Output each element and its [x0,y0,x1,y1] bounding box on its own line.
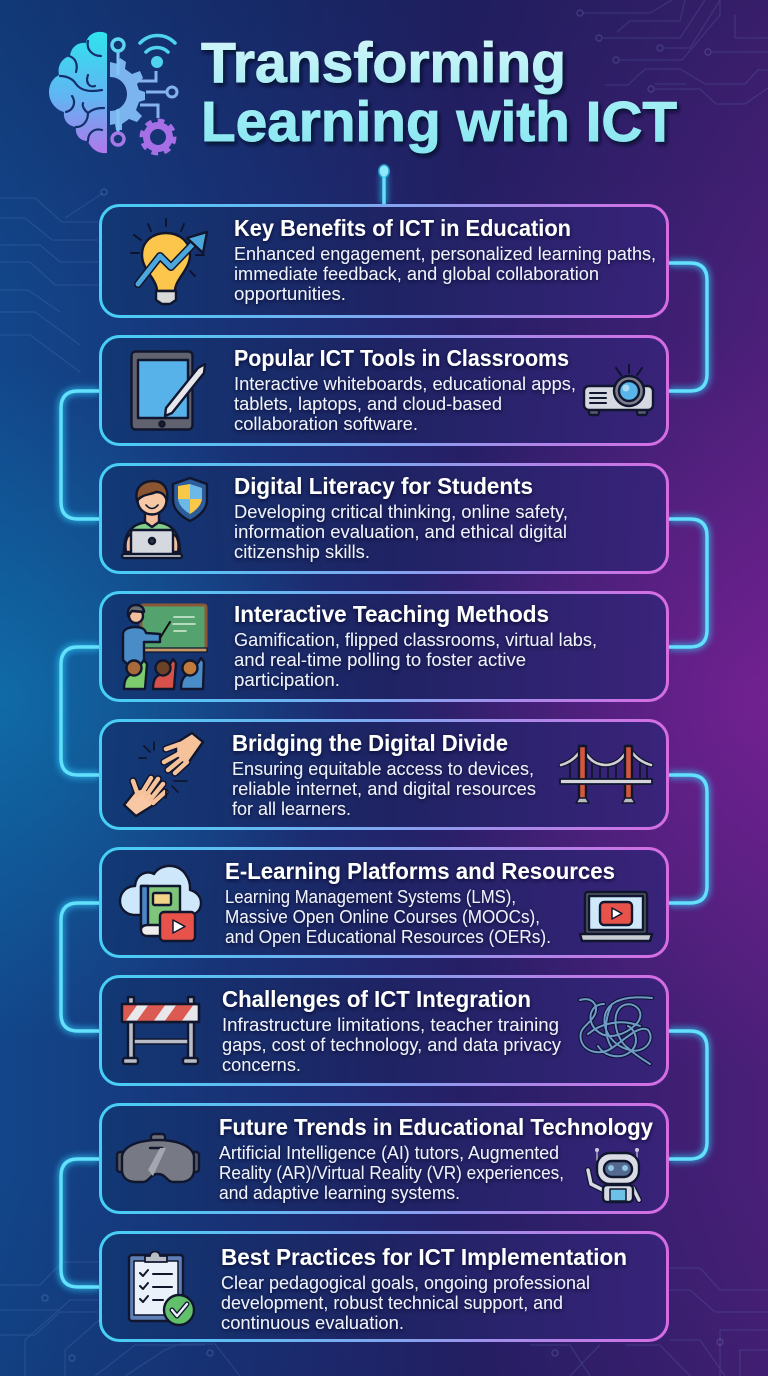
text: e-learning: Massive Open Online Courses (MOOCs), [225,907,540,927]
panel: key benefits [100,206,668,316]
text: digital divide: reliable internet, and digital resources [232,779,536,799]
icon: projector [584,365,653,415]
text: key benefits: opportunities. [234,284,346,304]
text: e-learning: E-Learning Platforms and Resources [225,858,615,884]
text: key benefits [234,215,656,304]
panel: digital literacy [100,464,668,572]
icon: cloud with book and play button [120,866,201,941]
icon: tablet and stylus [132,352,205,430]
text: digital literacy: Developing critical thinking, online safety, [234,502,568,522]
text: future trends: Artificial Intelligence (AI) tutors, Augmented [219,1143,559,1163]
icon: reaching hands [124,733,203,816]
panel: popular tools [100,336,668,444]
text: key benefits: immediate feedback, and global collaboration [234,264,599,284]
text: best practices: development, robust technical support, and [221,1293,563,1313]
text: interactive teaching: and real-time polling to foster active [234,650,526,670]
text: interactive teaching: participation. [234,670,340,690]
text: popular tools: Popular ICT Tools in Classrooms [234,345,569,371]
icon: student with laptop and shield [122,478,207,558]
text: key benefits: Key Benefits of ICT in Education [234,215,571,241]
text: digital divide: for all learners. [232,799,351,819]
title [201,31,677,154]
text: key benefits: Enhanced engagement, personalized learning paths, [234,244,656,264]
panel: challenges [100,976,668,1084]
panel: future trends [100,1104,668,1212]
text: best practices: continuous evaluation. [221,1313,404,1333]
icon: suspension bridge [560,746,652,803]
text: popular tools: Interactive whiteboards, educational apps, [234,374,576,394]
text: interactive teaching: Gamification, flipped classrooms, virtual labs, [234,630,597,650]
text: digital literacy: Digital Literacy for Students [234,473,533,499]
icon: VR headset [117,1134,199,1182]
text: popular tools: tablets, laptops, and cloud-based [234,394,502,414]
text: digital literacy: information evaluation, and ethical digital [234,522,567,542]
text: digital literacy [234,473,568,562]
text: challenges: gaps, cost of technology, and data privacy [222,1035,561,1055]
icon: teacher and students at chalkboard [123,605,207,689]
icon: road barrier [122,997,199,1064]
panel: e-learning [100,848,668,956]
connectors [61,164,707,1287]
text: best practices: Best Practices for ICT Implementation [221,1244,627,1270]
text: interactive teaching [234,601,597,690]
text: e-learning: Learning Management Systems (LMS), [225,887,516,907]
text: digital divide: Bridging the Digital Divide [232,730,508,756]
text: digital divide [232,730,536,819]
icon: clipboard with check [129,1252,194,1325]
icon: laptop with video [580,892,652,941]
text: e-learning: and Open Educational Resources (OERs). [225,927,551,947]
text: challenges [222,986,561,1075]
text: e-learning [225,858,615,947]
text: future trends [219,1114,653,1203]
text: digital divide: Ensuring equitable access to devices, [232,759,534,779]
text: popular tools: collaboration software. [234,414,418,434]
icon: tangled wires [580,997,652,1064]
text: challenges: Infrastructure limitations, teacher training [222,1015,559,1035]
text: future trends: Reality (AR)/Virtual Reality (VR) experiences, [219,1163,564,1183]
text: challenges: Challenges of ICT Integration [222,986,531,1012]
icon: brain with circuits [49,32,177,153]
panel: digital divide [100,720,668,828]
text: popular tools [234,345,576,434]
icon: robot [588,1148,639,1202]
text: best practices [221,1244,627,1333]
panel: best practices [100,1232,668,1340]
text: best practices: Clear pedagogical goals, ongoing professional [221,1273,590,1293]
title: Learning with ICT [201,90,677,154]
text: future trends: and adaptive learning systems. [219,1183,460,1203]
text: challenges: concerns. [222,1055,301,1075]
text: interactive teaching: Interactive Teaching Methods [234,601,549,627]
icon: light bulb with arrow [131,219,207,304]
title: Transforming [201,31,566,95]
text: digital literacy: citizenship skills. [234,542,370,562]
panel: interactive teaching [100,592,668,700]
text: future trends: Future Trends in Educational Technology [219,1114,653,1140]
